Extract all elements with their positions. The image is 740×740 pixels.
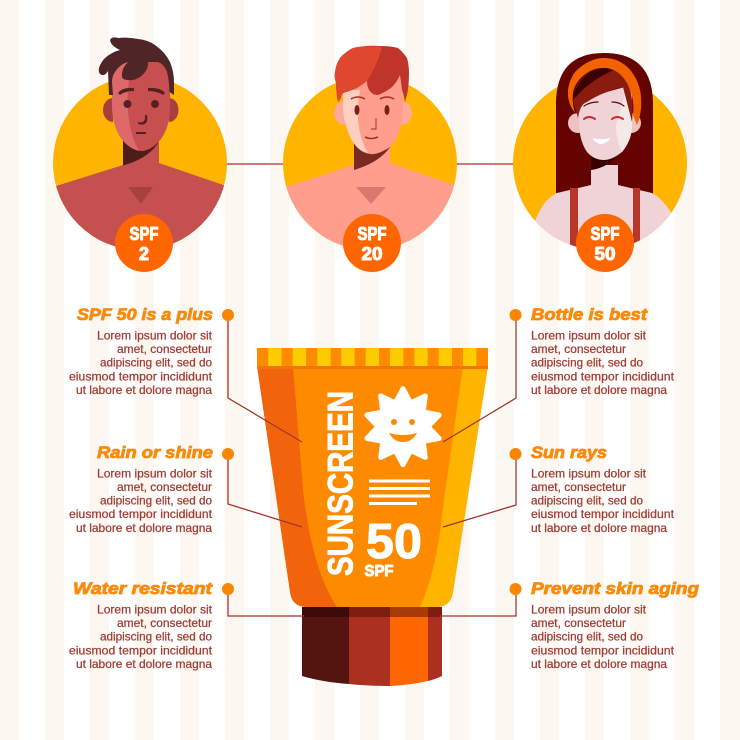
callout: Bottle is best: ut labore et dolore magna bbox=[531, 383, 667, 397]
callout: SPF 50 is a plus: eiusmod tempor incididunt bbox=[69, 370, 213, 384]
callout: Prevent skin aging: amet, consectetur bbox=[531, 616, 626, 630]
neck shadow bbox=[123, 130, 159, 166]
facial features bbox=[584, 102, 624, 119]
callout: Water resistant: eiusmod tempor incididunt bbox=[69, 644, 213, 658]
callout: SPF 50 is a plus: ut labore et dolore magna bbox=[76, 383, 212, 397]
face highlight bbox=[343, 90, 368, 153]
hair bbox=[335, 46, 409, 102]
connector: portraits bbox=[226, 163, 514, 165]
body bbox=[535, 165, 672, 247]
callout: Water resistant bbox=[69, 580, 304, 671]
callout: Water resistant: Lorem ipsum dolor sit bbox=[97, 602, 213, 616]
hair highlight bbox=[335, 46, 382, 102]
callout: Bottle is best: eiusmod tempor incididunt bbox=[531, 370, 675, 384]
callout: Prevent skin aging: eiusmod tempor incididunt bbox=[531, 644, 675, 658]
neck shadow bbox=[591, 150, 616, 170]
tube right shade bbox=[420, 366, 488, 607]
callout: Bottle is best: Bottle is best bbox=[531, 306, 649, 324]
callout: SPF 50 is a plus: Lorem ipsum dolor sit bbox=[97, 328, 213, 342]
callout: Rain or shine: eiusmod tempor incididunt bbox=[69, 507, 213, 521]
tube body bbox=[257, 366, 488, 607]
face highlight bbox=[616, 87, 632, 152]
sunscreen tube bbox=[257, 348, 488, 686]
headband bbox=[568, 58, 641, 125]
callout: Rain or shine: ut labore et dolore magna bbox=[76, 521, 212, 535]
callout: SPF 50 is a plus: SPF 50 is a plus bbox=[77, 306, 213, 324]
callout: Rain or shine: Rain or shine bbox=[97, 444, 213, 462]
product name: SUNSCREEN bbox=[322, 391, 360, 576]
callout: Water resistant: amet, consectetur bbox=[117, 616, 212, 630]
face bbox=[112, 62, 170, 151]
face bbox=[578, 85, 632, 160]
SPF label: SPF bbox=[364, 563, 394, 580]
callout: Sun rays: Sun rays bbox=[531, 444, 607, 462]
badge bbox=[343, 214, 401, 272]
callout: Water resistant: ut labore et dolore magna bbox=[76, 657, 212, 671]
callout: Sun rays bbox=[443, 444, 675, 535]
callout: Bottle is best: Lorem ipsum dolor sit bbox=[531, 328, 647, 342]
callout: Sun rays: amet, consectetur bbox=[531, 480, 626, 494]
callout: Sun rays: eiusmod tempor incididunt bbox=[531, 507, 675, 521]
neck shadow bbox=[354, 130, 390, 170]
badge text: SPF bbox=[358, 224, 386, 244]
tube left shade bbox=[257, 366, 337, 607]
callout: SPF 50 is a plus: adipiscing elit, sed do bbox=[100, 356, 212, 370]
badge text: SPF bbox=[130, 224, 158, 244]
callout: Prevent skin aging: adipiscing elit, sed do bbox=[531, 630, 643, 644]
smile bbox=[592, 138, 611, 144]
facial features bbox=[118, 88, 165, 134]
callout: Water resistant: adipiscing elit, sed do bbox=[100, 630, 212, 644]
callout: Sun rays: Lorem ipsum dolor sit bbox=[531, 466, 647, 480]
callout: Prevent skin aging bbox=[440, 580, 699, 671]
portrait: SPF 2 bbox=[50, 37, 232, 272]
callout: Water resistant: Water resistant bbox=[73, 580, 214, 598]
callout: Sun rays: ut labore et dolore magna bbox=[531, 521, 667, 535]
badge text: SPF bbox=[590, 224, 620, 244]
callout: SPF 50 is a plus: amet, consectetur bbox=[117, 342, 212, 356]
body bbox=[286, 147, 454, 246]
callout: Bottle is best bbox=[443, 306, 675, 442]
portrait: SPF 20: 20 bbox=[362, 244, 382, 264]
fringe bbox=[573, 68, 633, 122]
facial features bbox=[351, 97, 394, 138]
ears bbox=[334, 101, 412, 125]
callout: Rain or shine: amet, consectetur bbox=[117, 480, 212, 494]
face bbox=[343, 62, 403, 154]
face highlight bbox=[112, 62, 139, 151]
callout: Bottle is best: adipiscing elit, sed do bbox=[531, 356, 643, 370]
long hair bbox=[556, 53, 653, 194]
callout: Prevent skin aging: ut labore et dolore magna bbox=[531, 657, 667, 671]
callout: Rain or shine: Lorem ipsum dolor sit bbox=[97, 466, 213, 480]
portrait: SPF 50 bbox=[513, 53, 687, 272]
crimped band bbox=[257, 348, 488, 369]
callout: Prevent skin aging: Prevent skin aging bbox=[531, 580, 699, 598]
SPF number: 50 bbox=[366, 515, 422, 569]
fringe shadow bbox=[573, 68, 614, 100]
portrait: SPF 20 bbox=[280, 46, 460, 272]
portrait: SPF 2: 2 bbox=[139, 244, 149, 264]
ears bbox=[103, 98, 178, 122]
callout: SPF 50 is a plus bbox=[69, 306, 302, 442]
callout: Rain or shine bbox=[69, 444, 302, 535]
badge bbox=[576, 214, 634, 272]
callout: Sun rays: adipiscing elit, sed do bbox=[531, 494, 643, 508]
icon: smiling sun bbox=[367, 389, 439, 465]
ears bbox=[568, 113, 588, 133]
hair bbox=[99, 37, 174, 95]
badge bbox=[115, 214, 173, 272]
callout: Prevent skin aging: Lorem ipsum dolor sit bbox=[531, 602, 647, 616]
body bbox=[56, 142, 224, 246]
callout: Bottle is best: amet, consectetur bbox=[531, 342, 626, 356]
portrait: SPF 50: 50 bbox=[594, 244, 616, 264]
label text lines bbox=[369, 480, 430, 505]
callout: Rain or shine: adipiscing elit, sed do bbox=[100, 494, 212, 508]
cap bbox=[302, 607, 442, 686]
